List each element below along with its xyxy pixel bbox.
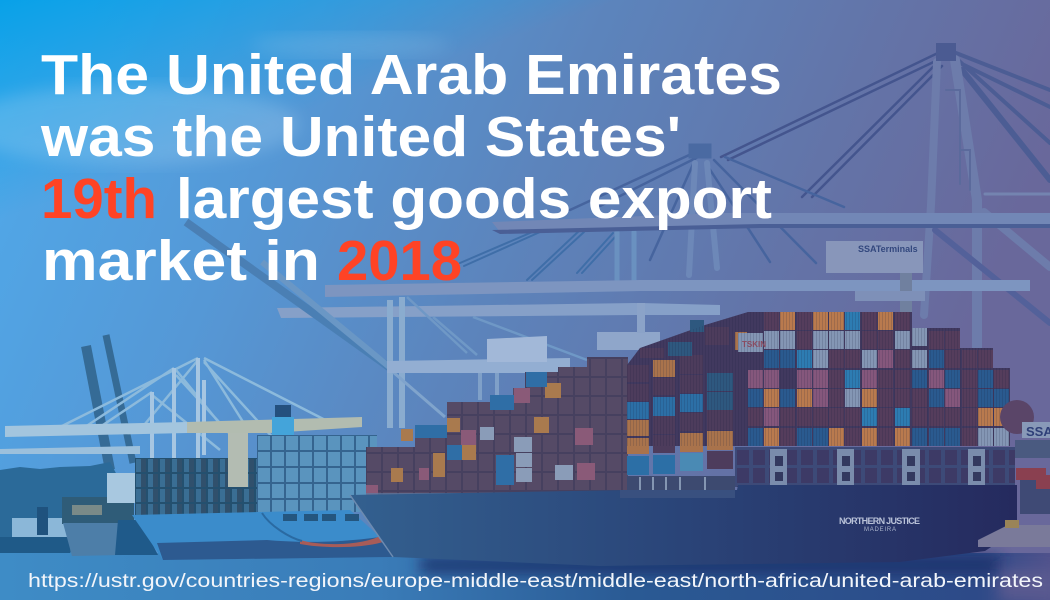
crane booms and SSA cabins	[277, 213, 1050, 350]
main container stack, colored grid	[627, 312, 1010, 446]
stern lashing of middle ship	[366, 493, 628, 507]
title: headline: market in	[42, 229, 320, 293]
lashing bridges below container stack	[627, 447, 1015, 490]
water	[0, 553, 1050, 600]
ship name text: NORTHERN JUSTICE	[839, 516, 920, 526]
crane gear and right edge cargo	[978, 400, 1050, 547]
third crane stays, mid	[460, 230, 634, 282]
second gantry crane	[570, 145, 844, 275]
main ship hull	[350, 485, 1017, 566]
title: headline	[40, 43, 782, 293]
title: headline: 19th	[41, 167, 157, 231]
container label: TSKIN: TSKIN	[742, 340, 766, 349]
third ship	[62, 460, 158, 556]
blue ship	[132, 405, 393, 560]
source url: https://ustr.gov/countries-regions/europe-middle-east/middle-east/north-africa/united-arab-emirates	[28, 571, 1043, 592]
left distant cranes	[0, 335, 362, 470]
title: headline: 2018	[337, 229, 462, 293]
main ship hull: MADEIRA	[864, 527, 896, 533]
water reflection, right	[1000, 570, 1050, 600]
water shadow under hull	[420, 556, 1000, 574]
title: headline: largest goods export	[176, 167, 772, 231]
label: SSA Terminals sign: SSATerminals	[858, 244, 918, 254]
main container stack, large blocks at left	[627, 312, 1010, 475]
title: headline: was the United States'	[40, 105, 681, 169]
title: headline: The United Arab Emirates	[41, 43, 782, 107]
small ship far left	[0, 507, 70, 554]
main gantry crane, right	[721, 45, 1050, 352]
middle container stack	[366, 357, 628, 495]
third crane, mid-left	[186, 222, 587, 428]
tree line	[0, 462, 125, 553]
